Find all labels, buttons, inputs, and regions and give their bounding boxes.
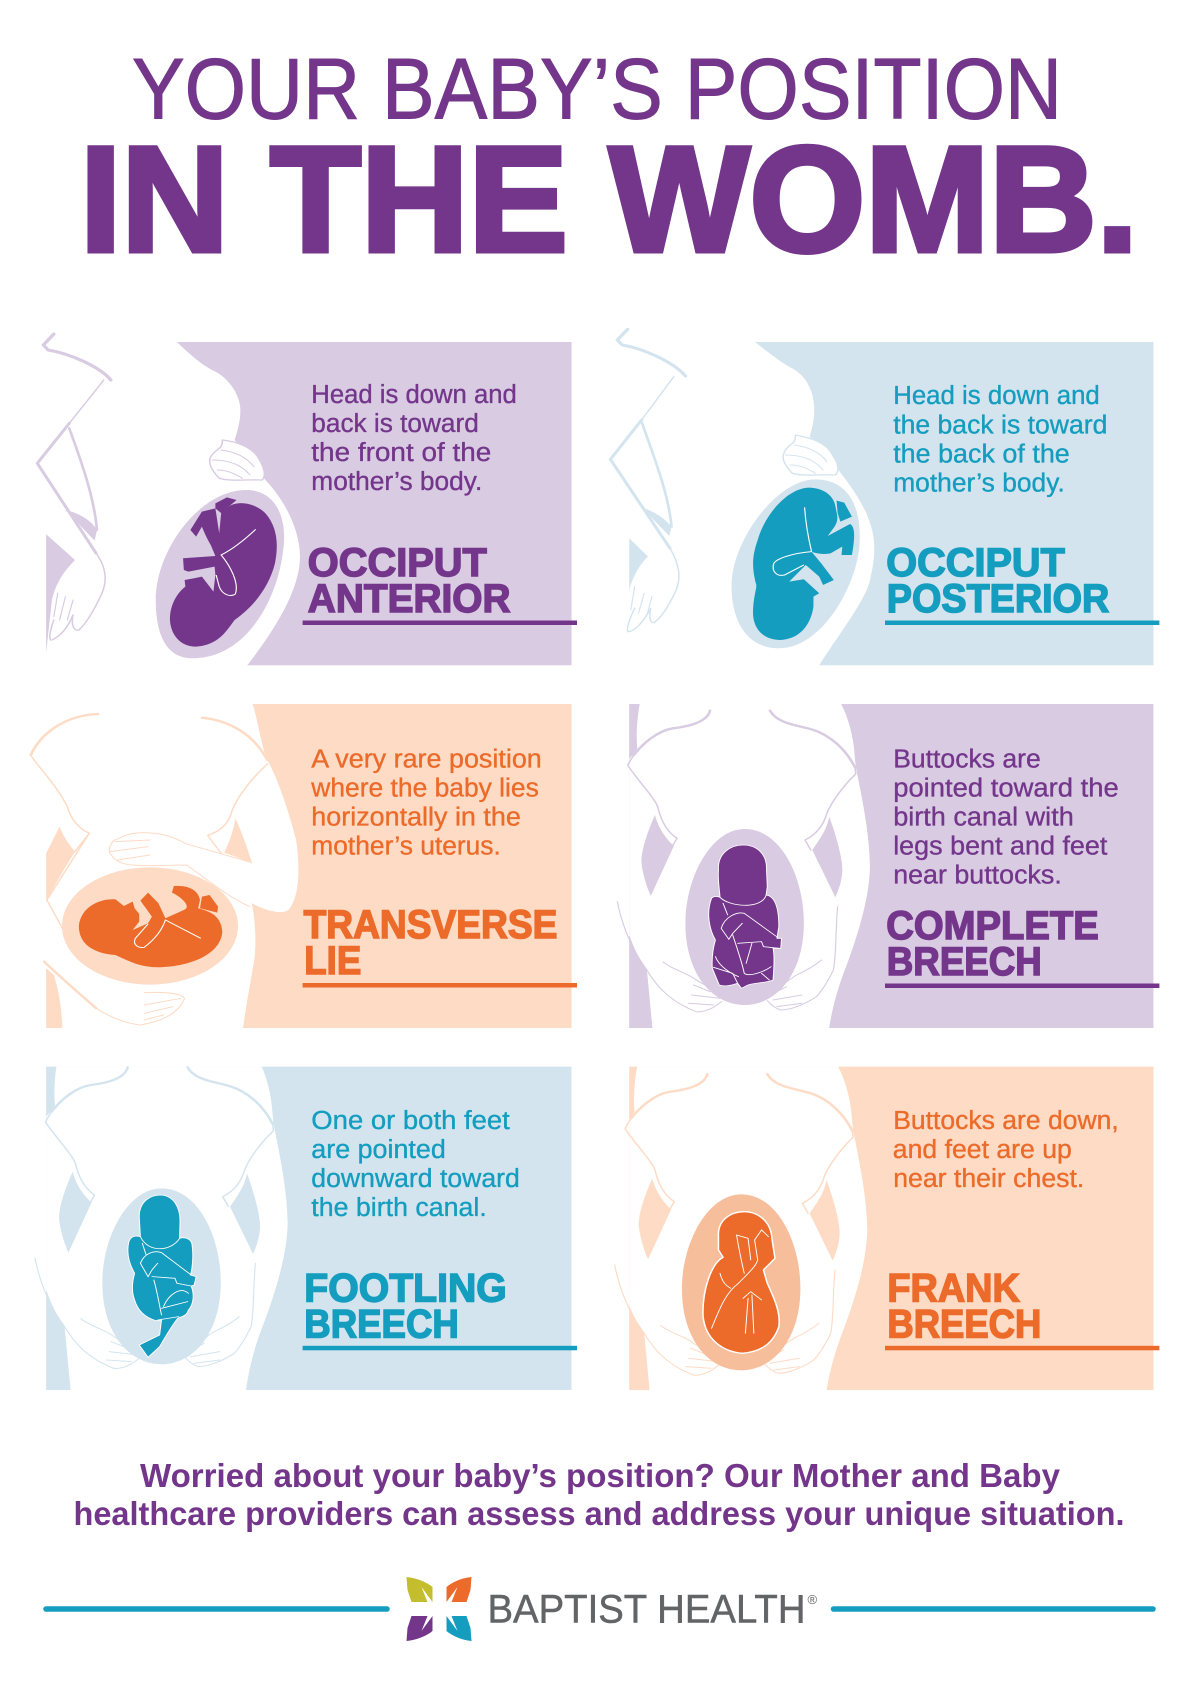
illustration: front view mother with baby: [29, 1052, 572, 1400]
heading: TRANSVERSE: [304, 903, 557, 947]
panel: occiput anterior: [37, 334, 577, 672]
baby: [170, 497, 277, 647]
heading: BREECH: [304, 1303, 459, 1347]
footer rule left: [46, 1606, 387, 1612]
description: [893, 1107, 1119, 1193]
call to action: [74, 1457, 1124, 1532]
call to action: Worried about your baby’s position? Our Mother and Baby: [140, 1457, 1061, 1494]
description: [310, 746, 542, 860]
description: the front of the: [311, 439, 491, 467]
illustration: side view mother with baby: [610, 329, 1153, 672]
heading: [303, 903, 577, 988]
illustration: front view mother with baby: [612, 695, 1153, 1043]
wordmark: BAPTIST HEALTH: [488, 1588, 806, 1632]
description: are pointed: [311, 1136, 446, 1164]
title line one: YOUR BABY’S POSITION: [132, 42, 1062, 138]
description: birth canal with: [893, 803, 1074, 831]
panel: transverse lie: [23, 700, 577, 1033]
heading: BREECH: [887, 1303, 1041, 1347]
footer rule right: [834, 1606, 1153, 1612]
description: where the baby lies: [310, 774, 539, 802]
description: back is toward: [311, 410, 479, 438]
title: [80, 42, 1138, 283]
heading: OCCIPUT: [886, 541, 1065, 585]
panel: frank breech: [609, 1058, 1159, 1407]
description: A very rare position: [311, 746, 542, 774]
description: [311, 1107, 520, 1222]
baby: [753, 488, 854, 640]
baby: [709, 845, 782, 988]
baby: [128, 1195, 196, 1357]
icon: four leaves: [406, 1577, 472, 1641]
title line two: IN THE WOMB.: [80, 115, 1138, 283]
description: legs bent and feet: [893, 832, 1107, 860]
illustration: front view mother with baby: [609, 1058, 1153, 1407]
description: Head is down and: [311, 381, 517, 409]
description: Head is down and: [893, 382, 1100, 410]
description: [893, 746, 1119, 890]
description: Buttocks are: [893, 746, 1041, 774]
heading: [885, 1267, 1159, 1350]
call to action: healthcare providers can assess and address your unique situation.: [74, 1495, 1124, 1532]
description: mother’s body.: [893, 470, 1065, 498]
heading: FOOTLING: [304, 1267, 507, 1311]
illustration: front view mother with baby: [23, 700, 572, 1033]
heading: OCCIPUT: [308, 541, 487, 585]
description: [893, 382, 1107, 498]
description: the birth canal.: [311, 1194, 487, 1222]
heading: FRANK: [887, 1267, 1020, 1311]
description: mother’s body.: [311, 468, 482, 496]
description: near buttocks.: [893, 862, 1062, 890]
description: [311, 381, 517, 496]
logo: [406, 1577, 818, 1641]
heading: [885, 904, 1159, 988]
description: the back of the: [893, 441, 1070, 469]
description: One or both feet: [311, 1107, 510, 1135]
panel: footling breech: [29, 1052, 577, 1400]
description: the back is toward: [893, 412, 1107, 440]
heading: ANTERIOR: [308, 577, 511, 621]
baby: [79, 886, 222, 967]
description: downward toward: [311, 1165, 520, 1193]
heading: COMPLETE: [886, 904, 1099, 948]
description: Buttocks are down,: [893, 1107, 1119, 1135]
description: pointed toward the: [893, 774, 1119, 802]
baby: [703, 1212, 779, 1353]
heading: [303, 541, 577, 625]
heading: POSTERIOR: [887, 577, 1109, 621]
registered mark: ®: [808, 1592, 818, 1607]
heading: [303, 1267, 577, 1350]
description: near their chest.: [893, 1165, 1084, 1193]
heading: LIE: [304, 939, 361, 983]
illustration: side view mother with baby: [37, 334, 572, 672]
description: and feet are up: [893, 1136, 1072, 1164]
description: horizontally in the: [311, 803, 521, 831]
panel: complete breech: [612, 695, 1159, 1043]
heading: [885, 541, 1159, 625]
heading: BREECH: [887, 940, 1042, 984]
description: mother’s uterus.: [311, 832, 501, 860]
panel: occiput posterior: [610, 329, 1159, 672]
